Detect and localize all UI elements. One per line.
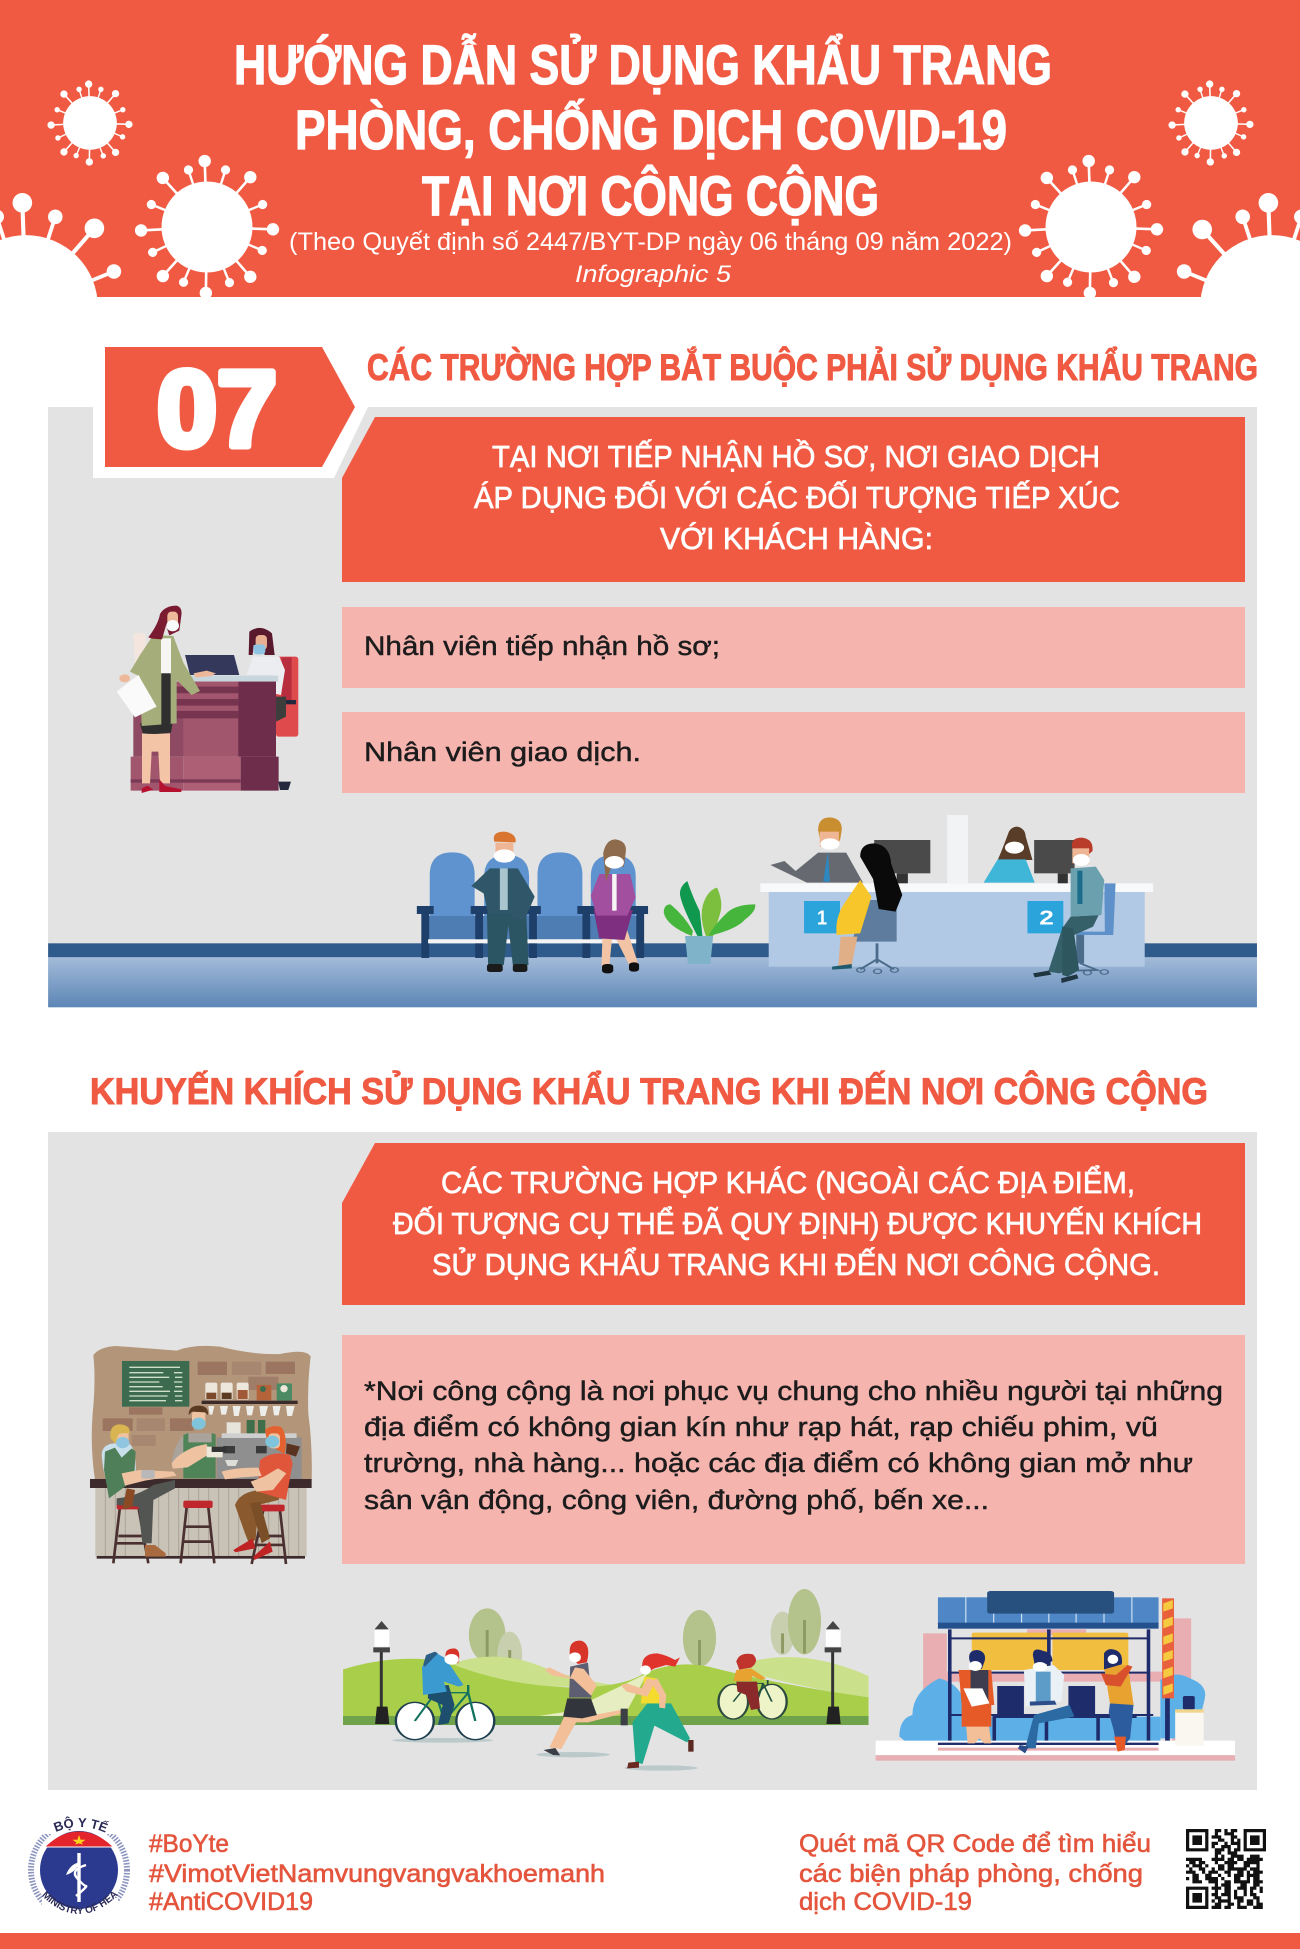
icon: virus top left (47, 80, 133, 166)
footer bar (0, 1933, 1300, 1949)
list item: transaction staff (342, 712, 1245, 793)
hashtags: #VimotVietNamvungvangvakhoemanh (149, 1860, 605, 1888)
QR call to action: các biện pháp phòng, chống (799, 1860, 1143, 1888)
panel: encouraged mask use (48, 1132, 1257, 1790)
text block: public place definition (342, 1335, 1245, 1564)
callout: other cases: SỬ DỤNG KHẨU TRANG KHI ĐẾN NƠI CÔNG CỘNG. (432, 1246, 1160, 1282)
text block: public place definition: sân vận động, công viên, đường phố, bến xe... (364, 1485, 989, 1515)
hashtags: #AntiCOVID19 (149, 1888, 313, 1916)
illustration: service counter scene (48, 815, 1257, 1007)
infographic number: Infographic 5 (575, 261, 732, 288)
title: HƯỚNG DẪN SỬ DỤNG KHẨU TRANG (234, 33, 1052, 96)
heading: encouraged mask use: KHUYẾN KHÍCH SỬ DỤNG KHẨU TRANG KHI ĐẾN NƠI CÔNG CỘNG (90, 1070, 1208, 1112)
illustration: cafe (90, 1346, 312, 1564)
panel: mandatory mask use (48, 340, 1258, 1007)
list item: reception staff (342, 607, 1245, 688)
callout: where it applies: VỚI KHÁCH HÀNG: (660, 521, 933, 556)
badge 07 (93, 340, 368, 478)
logo: Ministry of Health: BỘ Y TẾ (53, 1816, 109, 1832)
illustration: service counter scene: 2 (1039, 906, 1054, 929)
QR call to action: dịch COVID-19 (799, 1888, 972, 1916)
text block: public place definition: trường, nhà hàng... hoặc các địa điểm có không gian mở như (364, 1448, 1193, 1478)
list item: transaction staff: Nhân viên giao dịch. (364, 737, 641, 767)
title: PHÒNG, CHỐNG DỊCH COVID-19 (295, 98, 1007, 161)
text block: public place definition: địa điểm có không gian kín như rạp hát, rạp chiếu phim, vũ (364, 1412, 1158, 1442)
title (234, 33, 1052, 227)
header banner (0, 0, 1300, 421)
icon: virus middle right (1019, 155, 1163, 299)
subtitle: (Theo Quyết định số 2447/BYT-DP ngày 06 tháng 09 năm 2022) (289, 228, 1012, 256)
callout: other cases: CÁC TRƯỜNG HỢP KHÁC (NGOÀI CÁC ĐỊA ĐIỂM, (441, 1165, 1135, 1200)
icon: virus top right (1168, 80, 1254, 166)
hashtags: #BoYte (149, 1830, 229, 1858)
logo: Ministry of Health: MINISTRY OF HEALTH (42, 1891, 118, 1914)
text block: public place definition: *Nơi công cộng là nơi phục vụ chung cho nhiều người tại những (364, 1376, 1223, 1406)
callout: where it applies: TẠI NƠI TIẾP NHẬN HỒ SƠ, NƠI GIAO DỊCH (492, 438, 1100, 474)
icon: virus middle left (135, 155, 279, 299)
illustration: service counter scene: 1 (817, 906, 827, 929)
icon: virus bottom right (1158, 193, 1300, 421)
callout: where it applies: ÁP DỤNG ĐỐI VỚI CÁC ĐỐI TƯỢNG TIẾP XÚC (474, 479, 1120, 515)
hashtags (149, 1830, 605, 1916)
callout: other cases (342, 1143, 1245, 1305)
icon: virus bottom left (0, 193, 140, 421)
QR call to action (799, 1830, 1151, 1916)
callout: other cases: ĐỐI TƯỢNG CỤ THỂ ĐÃ QUY ĐỊNH) ĐƯỢC KHUYẾN KHÍCH (393, 1205, 1202, 1241)
list item: reception staff: Nhân viên tiếp nhận hồ sơ; (364, 631, 720, 661)
callout: where it applies (342, 417, 1245, 582)
QR code (1186, 1829, 1266, 1909)
title: TẠI NƠI CÔNG CỘNG (422, 164, 879, 227)
illustration: reception desk (117, 606, 298, 793)
QR call to action: Quét mã QR Code để tìm hiểu (799, 1830, 1151, 1858)
badge 07: 07 (157, 348, 277, 469)
illustration: park joggers and cyclists (343, 1589, 1235, 1771)
